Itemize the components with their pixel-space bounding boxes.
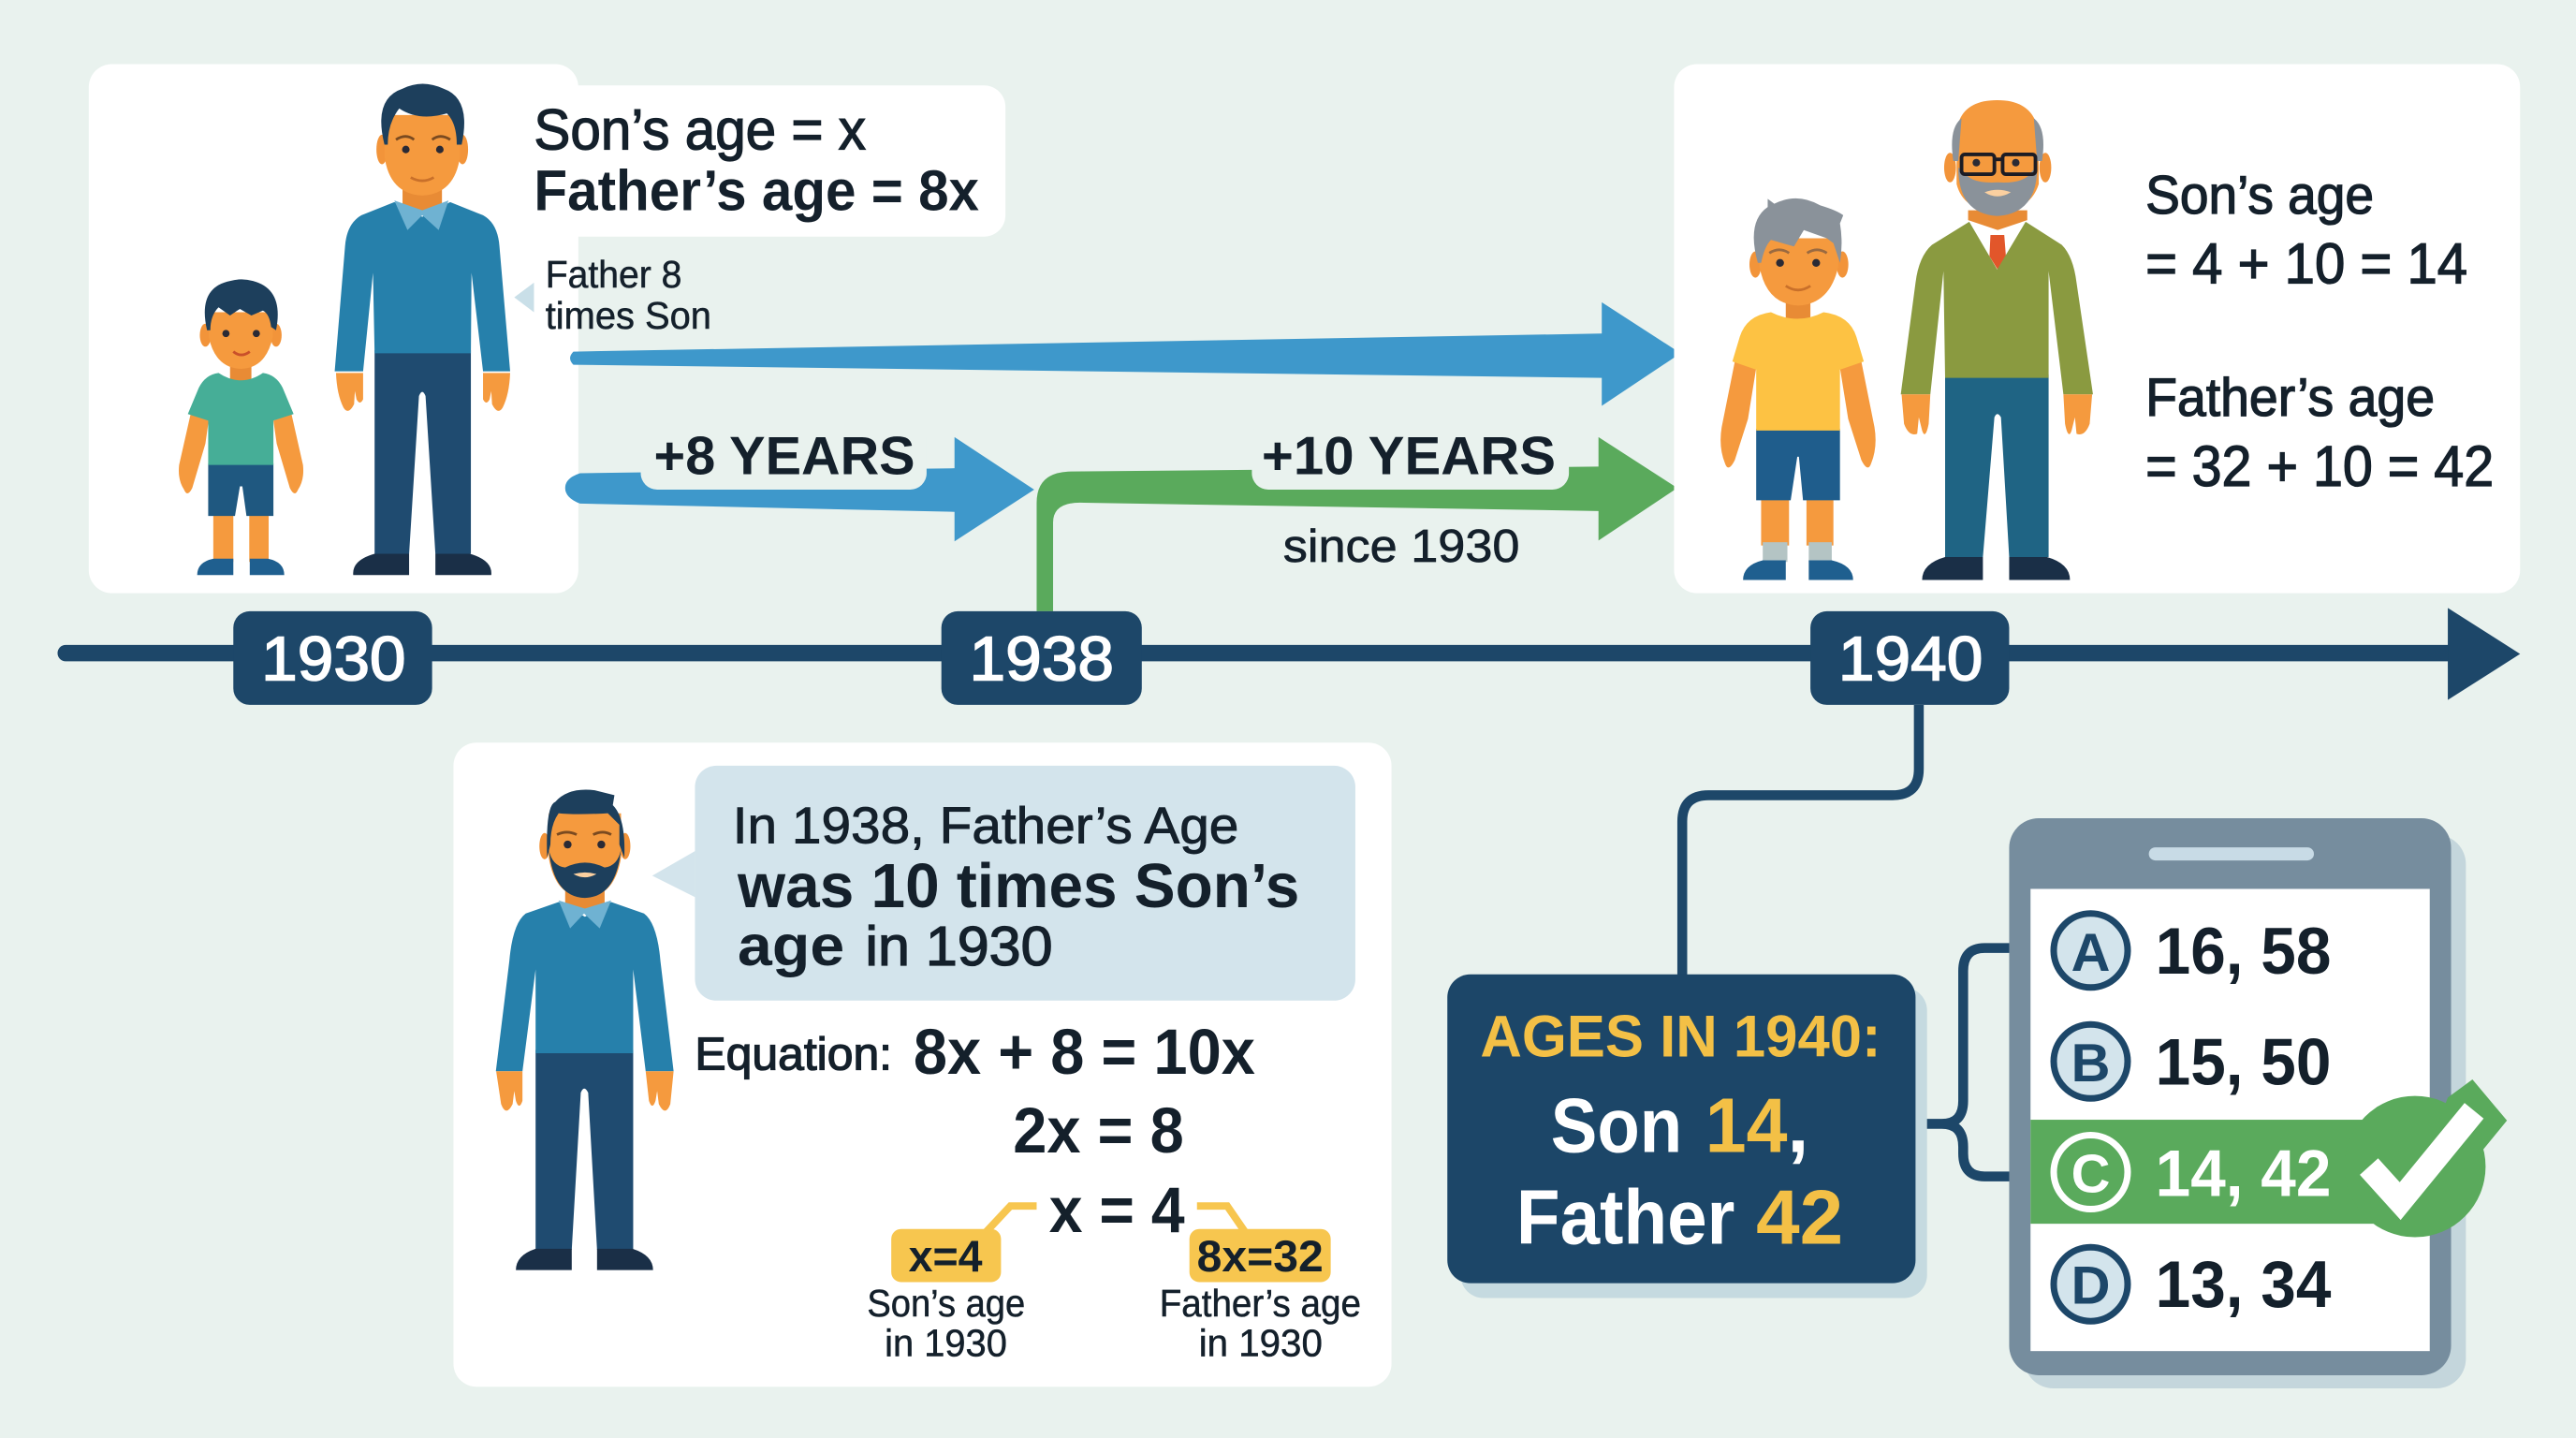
option A xyxy=(2054,914,2331,988)
annotation: father 8 times son: times Son xyxy=(546,294,711,337)
result box: ages in 1940: AGES IN 1940: xyxy=(1480,1004,1881,1069)
equation steps: Equation: xyxy=(695,1030,892,1080)
callout: variables xyxy=(493,85,1005,237)
equation steps: x = 4 xyxy=(1049,1174,1185,1246)
equation steps: 2x = 8 xyxy=(1013,1094,1184,1167)
badge: 1938 xyxy=(942,611,1142,705)
panel: 1938 equation xyxy=(453,742,1392,1387)
badge: 1938: 1938 xyxy=(970,625,1114,695)
callout: father's age in 1930: 8x=32 xyxy=(1197,1232,1324,1282)
option B: 15, 50 xyxy=(2156,1024,2331,1098)
text: father's age 1940 xyxy=(2145,368,2494,499)
text: son's age 1940: Son’s age xyxy=(2145,166,2374,226)
option B: B xyxy=(2071,1034,2110,1093)
text: son's age 1940: = 4 + 10 = 14 xyxy=(2145,232,2467,297)
badge: 1940: 1940 xyxy=(1838,625,1983,695)
option D: 13, 34 xyxy=(2156,1247,2331,1321)
text: son's age 1940 xyxy=(2145,166,2467,297)
speech bubble: 1938 statement: in 1930 xyxy=(865,915,1053,977)
label: plus 10 years: +10 YEARS xyxy=(1262,426,1556,486)
option C correct: 14, 42 xyxy=(2156,1136,2331,1210)
callout: father's age in 1930: Father’s age xyxy=(1160,1282,1361,1325)
result box: ages in 1940 xyxy=(1447,975,1927,1298)
option A: 16, 58 xyxy=(2156,914,2331,988)
badge: 1930: 1930 xyxy=(261,625,406,695)
callout: father's age in 1930 xyxy=(1160,1206,1361,1365)
callout: son's age in 1930: in 1930 xyxy=(885,1322,1007,1365)
option D: D xyxy=(2071,1256,2110,1316)
badge: 1940 xyxy=(1810,611,2009,705)
callout: father's age in 1930: in 1930 xyxy=(1199,1322,1323,1365)
badge: 1930 xyxy=(233,611,432,705)
callout: variables: Son’s age = x xyxy=(534,98,866,163)
panel: 1940 father and son xyxy=(1674,64,2520,594)
annotation: father 8 times son xyxy=(514,253,711,337)
arrow: plus 8 years xyxy=(565,420,1034,541)
figure: father 1938 xyxy=(496,790,674,1270)
figure: father 1930 xyxy=(335,84,510,575)
figure: father 1940 xyxy=(1901,100,2093,580)
callout: variables: Father’s age = 8x xyxy=(534,159,979,224)
timeline xyxy=(66,608,2520,705)
annotation: father 8 times son: Father 8 xyxy=(546,253,681,296)
figure: son 1930 xyxy=(179,279,303,575)
option C correct xyxy=(2030,1079,2507,1238)
result box: ages in 1940: 42 xyxy=(1756,1175,1843,1261)
option C correct: C xyxy=(2071,1144,2110,1204)
option D xyxy=(2054,1247,2331,1321)
speech bubble: 1938 statement: was 10 times Son’s xyxy=(737,852,1299,921)
option A: A xyxy=(2071,923,2110,983)
equation steps xyxy=(695,1016,1255,1246)
callout: son's age in 1930 xyxy=(867,1206,1036,1365)
option B xyxy=(2054,1024,2331,1098)
speech bubble: 1938 statement xyxy=(652,766,1355,1001)
callout: son's age in 1930: x=4 xyxy=(909,1232,983,1282)
speech bubble: 1938 statement: age xyxy=(738,914,844,978)
text: father's age 1940: Father’s age xyxy=(2145,368,2435,428)
callout: son's age in 1930: Son’s age xyxy=(867,1282,1025,1325)
speech bubble: 1938 statement: In 1938, Father’s Age xyxy=(733,797,1238,854)
arrow: plus 10 years from 1938 xyxy=(1036,420,1677,611)
result box: ages in 1940: 14 xyxy=(1705,1082,1788,1168)
icon: check mark xyxy=(2344,1079,2507,1238)
connector: result box to phone options xyxy=(1915,948,2011,1177)
figure: son 1940 xyxy=(1720,198,1876,580)
result box: ages in 1940: Father xyxy=(1516,1175,1734,1261)
result box: ages in 1940: Son xyxy=(1551,1082,1682,1168)
label: since 1930: since 1930 xyxy=(1283,521,1519,572)
equation steps: 8x + 8 = 10x xyxy=(914,1016,1255,1088)
connector: 1940 to result box xyxy=(1682,705,1919,976)
panel: 1930 father and son xyxy=(89,64,1005,594)
arrow: long blue arrow to 1940 xyxy=(570,302,1680,405)
label: plus 8 years: +8 YEARS xyxy=(654,426,915,486)
result box: ages in 1940: , xyxy=(1788,1082,1808,1168)
text: father's age 1940: = 32 + 10 = 42 xyxy=(2145,434,2494,499)
phone: answer options xyxy=(2009,818,2507,1388)
